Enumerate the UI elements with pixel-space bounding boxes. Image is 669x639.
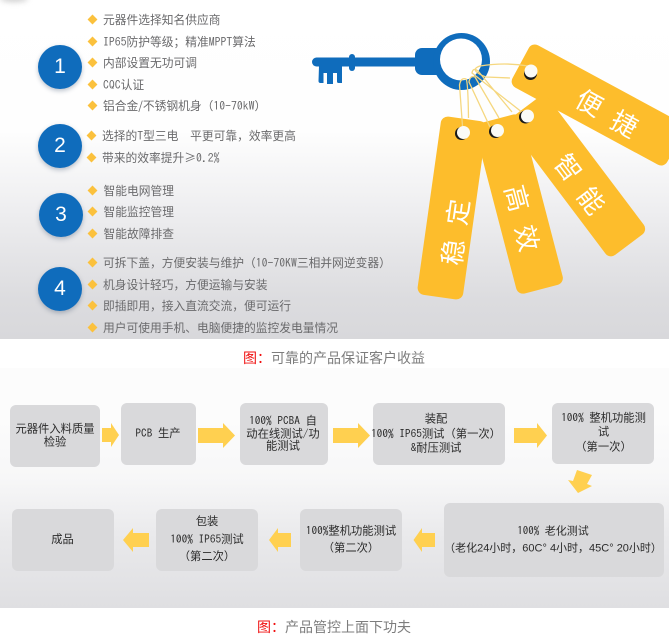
list 4	[88, 254, 391, 336]
arrow: left	[414, 528, 435, 552]
item: 铝合金/不锈钢机身（10-70kW）	[103, 97, 266, 114]
tag text: 稳定: 定	[437, 197, 477, 227]
badge 2: 2	[54, 134, 66, 157]
box text: （第二次）	[323, 542, 379, 554]
box text: 元器件入料质量	[15, 424, 95, 436]
box text: 100% IP65测试（第一次）	[371, 428, 501, 440]
tag text: 智能	[546, 145, 615, 222]
tag: 智能	[506, 93, 648, 259]
item: CQC认证	[103, 76, 144, 92]
tag text: 便捷	[570, 80, 645, 145]
tag text: 智能: 能	[569, 178, 615, 222]
item: 即插即用，接入直流交流，便可运行	[103, 297, 291, 314]
top-left smudge	[0, 0, 28, 2]
badge 4	[38, 267, 82, 311]
box text: （第二次）	[179, 551, 235, 563]
tag text: 便捷: 捷	[605, 101, 645, 145]
badge 3: 3	[55, 203, 67, 226]
badge 4: 4	[54, 277, 66, 300]
caption 2: 图：产品管控上面下功夫	[257, 619, 411, 635]
box: finished product	[12, 509, 114, 571]
arrow: down	[568, 470, 592, 493]
box text: 成品	[51, 534, 74, 546]
badge 1: 1	[54, 55, 66, 78]
box text	[15, 422, 95, 448]
box text: 装配	[425, 413, 447, 425]
box text: &耐压测试	[411, 442, 461, 454]
tag text: 高效	[497, 181, 549, 255]
item: 智能故障排查	[104, 224, 174, 242]
box: packaging	[156, 509, 258, 571]
tag text: 便捷: 便	[570, 80, 610, 124]
arrow	[333, 423, 370, 448]
box: PCBA test	[240, 403, 328, 465]
item: 可拆下盖，方便安装与维护（10-70KW三相并网逆变器）	[103, 254, 391, 271]
tag: 便捷	[509, 42, 669, 168]
box text: PCB 生产	[135, 428, 181, 440]
tag text: 高效: 高	[497, 181, 539, 215]
badge 2	[38, 124, 82, 168]
tag text: 智能: 智	[546, 145, 592, 189]
tag: 稳定	[417, 116, 487, 300]
item: 智能监控管理	[104, 203, 174, 220]
box text	[170, 515, 244, 563]
box text	[306, 524, 396, 554]
item: 智能电网管理	[104, 182, 174, 198]
box text: 100%整机功能测试	[306, 526, 396, 538]
box: incoming inspection	[10, 405, 100, 467]
item: 选择的T型三电 平更可靠，效率更高	[102, 127, 296, 144]
box text: 100% 老化测试	[517, 526, 589, 538]
box text: 100% PCBA 自	[249, 415, 317, 427]
box text: （老化24小时，60C° 4小时，45C° 20小时）	[444, 542, 662, 554]
box: function test 2	[300, 509, 402, 571]
box text	[371, 412, 501, 454]
box text: （第一次）	[575, 441, 632, 453]
item: 机身设计轻巧，方便运输与安装	[103, 276, 268, 292]
tag text: 稳定	[432, 197, 477, 267]
box text	[444, 525, 662, 554]
arrow	[198, 423, 235, 448]
box: aging test	[444, 503, 664, 577]
item: IP65防护等级；精准MPPT算法	[103, 32, 256, 50]
box text: 100% 整机功能测	[561, 413, 646, 425]
item: 带来的效率提升≥0.2%	[102, 148, 220, 166]
list 2	[86, 127, 296, 166]
key and tags illustration	[312, 33, 669, 300]
box: PCB production	[121, 403, 196, 465]
box text: 动在线测试/功	[246, 428, 320, 440]
tag: 高效	[474, 113, 564, 295]
list 1	[88, 11, 266, 114]
item: 用户可使用手机、电脑便捷的监控发电量情况	[103, 318, 338, 336]
box: assembly	[373, 403, 505, 465]
panel: product advantages	[0, 0, 669, 339]
tag text: 高效: 效	[507, 221, 549, 255]
box: function test 1	[552, 403, 654, 464]
box text: 100% IP65测试	[170, 534, 244, 546]
box text: 包装	[196, 516, 218, 528]
box text: 试	[598, 427, 609, 439]
box text	[561, 412, 646, 453]
arrow	[269, 528, 291, 552]
badge 3	[39, 193, 83, 237]
box text: 检验	[44, 436, 66, 448]
badge 1	[38, 45, 82, 89]
panel: quality control process	[0, 368, 669, 608]
icon: blue key	[312, 33, 490, 90]
arrow	[514, 423, 547, 448]
box text	[246, 414, 320, 452]
strings connecting tags to ring	[460, 64, 528, 133]
arrow	[123, 528, 149, 552]
arrow	[102, 423, 119, 447]
tag text: 稳定: 稳	[432, 237, 472, 267]
item: 内部设置无功可调	[103, 54, 197, 71]
list 3	[88, 182, 174, 242]
caption 1: 图：可靠的产品保证客户收益	[243, 350, 425, 366]
item: 元器件选择知名供应商	[103, 11, 220, 28]
tag holes	[455, 64, 538, 140]
box text: 能测试	[266, 440, 300, 452]
